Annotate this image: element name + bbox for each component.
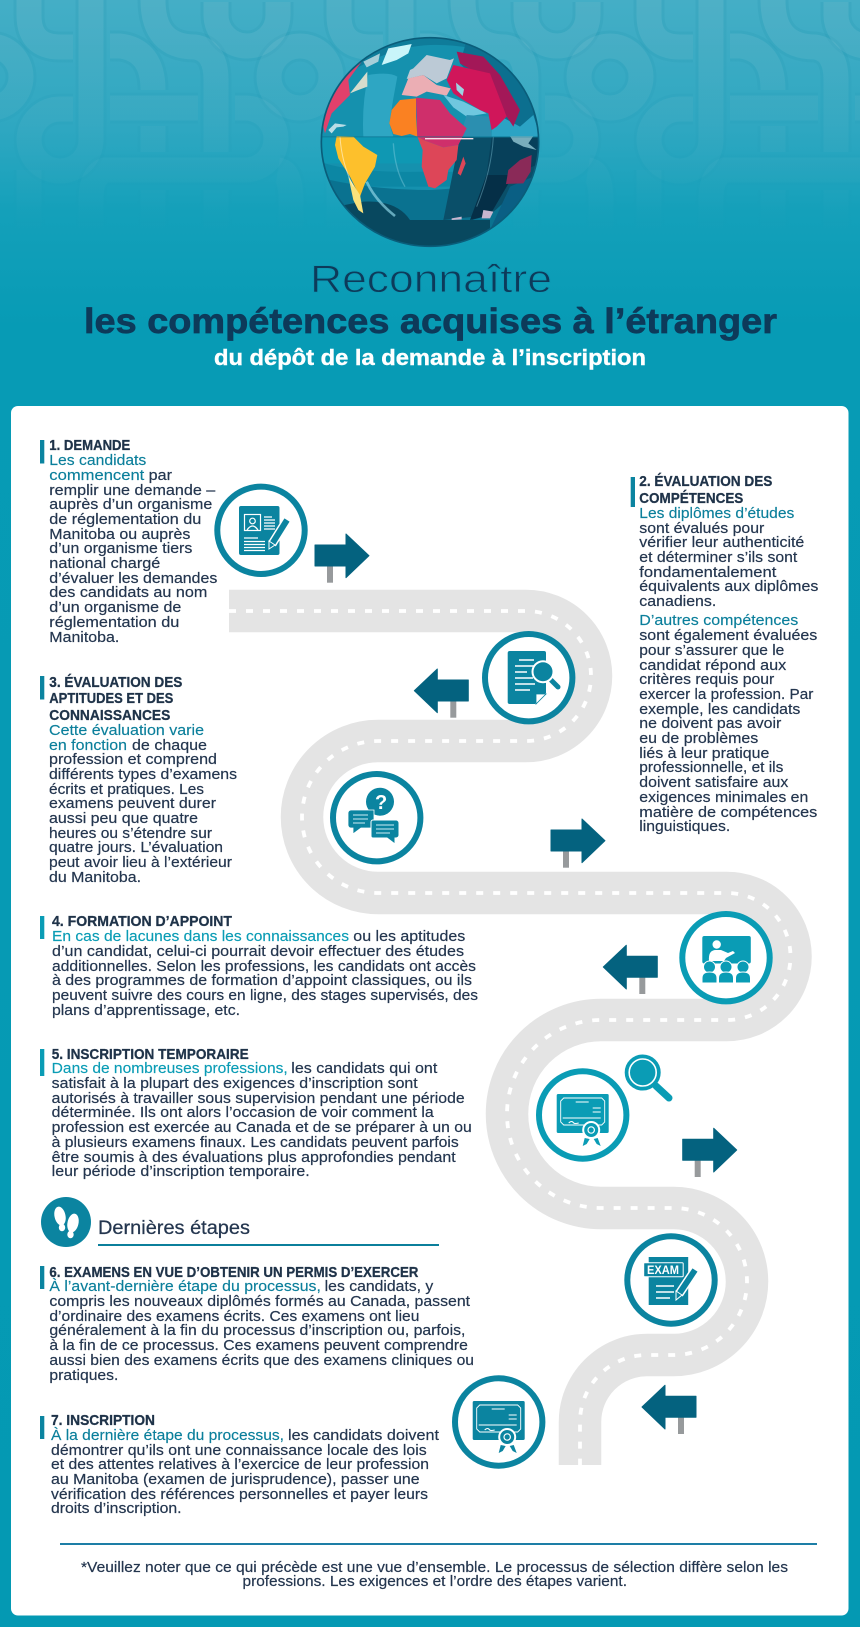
section 4: formation d'appoint: additionnelles. Selon les professions, les candidats ont accès xyxy=(52,958,476,975)
section 1: demande: Les candidats xyxy=(49,452,146,469)
arrow sign 5 xyxy=(683,1128,737,1177)
section 3: evaluation des aptitudes xyxy=(40,674,237,886)
section 1: demande: auprès d’un organisme xyxy=(49,496,212,513)
section 2: evaluation des competences: COMPÉTENCES xyxy=(639,490,744,507)
section 2: evaluation des competences: sont évalués pour xyxy=(639,520,764,537)
section 2: evaluation des competences: professionnelle, et ils xyxy=(639,759,783,776)
icon: teacher and class xyxy=(682,914,770,1001)
footnote: *Veuillez noter que ce qui précède est une vue d’ensemble. Le processus de sélection diffère selon les xyxy=(81,1559,788,1576)
section 2: evaluation des competences: doivent satisfaire aux xyxy=(639,774,789,791)
section 3: evaluation des aptitudes: quatre jours. L’évaluation xyxy=(49,839,223,856)
section 6: examens: compris les nouveaux diplômés formés au Canada, passent xyxy=(49,1293,471,1310)
icon: document review xyxy=(485,634,572,721)
arrow sign 1 xyxy=(315,534,369,583)
section 3: evaluation des aptitudes: de chaque xyxy=(132,737,207,754)
section 7: inscription xyxy=(40,1413,440,1517)
icon: application form xyxy=(217,487,305,574)
section 4: formation d'appoint: plans d’apprentissage, etc. xyxy=(52,1002,240,1019)
panel: white card xyxy=(11,406,848,1616)
section 2: evaluation des competences: pour s’assurer que le xyxy=(639,642,784,659)
section 7: inscription: vérification des références personnelles et payer leurs xyxy=(51,1486,428,1503)
section 3: evaluation des aptitudes: CONNAISSANCES xyxy=(49,708,171,724)
footnote: professions. Les exigences et l’ordre des étapes varient. xyxy=(242,1573,627,1590)
section 1: demande: d’évaluer les demandes xyxy=(49,570,217,587)
section 4: formation d'appoint: ou les aptitudes xyxy=(353,928,465,945)
section 1: demande: Manitoba ou auprès xyxy=(49,526,190,543)
arrow sign 6 xyxy=(642,1385,696,1434)
section 6: examens: pratiques. xyxy=(49,1367,118,1384)
section 4: formation d'appoint: à des programmes de formation d’appoint classiques, ou ils xyxy=(52,972,472,989)
road xyxy=(229,611,790,1465)
icon: magnifying glass xyxy=(626,1056,669,1098)
section 2: evaluation des competences: matière de compétences xyxy=(639,804,817,821)
section 7: inscription: démontrer qu’ils ont une connaissance locale des lois xyxy=(51,1442,427,1459)
section 4: formation d'appoint: peuvent suivre des cours en ligne, des stages supervisés, des xyxy=(52,987,478,1004)
section 1: demande: d’un organisme de xyxy=(49,599,181,616)
section 2: evaluation des competences: eu de problèmes xyxy=(639,730,758,747)
section 6: examens xyxy=(40,1265,474,1384)
section 1: demande: par xyxy=(149,467,172,484)
section 1: demande xyxy=(40,438,217,646)
section 2: evaluation des competences: liés à leur pratique xyxy=(639,745,769,762)
section 1: demande: 1. DEMANDE xyxy=(49,438,131,454)
arrow sign 4 xyxy=(603,945,657,994)
arrow sign 2 xyxy=(414,669,468,718)
section 5: inscription temporaire: 5. INSCRIPTION TEMPORAIRE xyxy=(52,1047,249,1063)
section 2: evaluation des competences: fondamentalement xyxy=(639,564,777,581)
section 4: formation d'appoint: d’un candidat, celui-ci pourrait devoir effectuer des études xyxy=(52,943,464,960)
section 2: evaluation des competences: 2. ÉVALUATION DES xyxy=(639,473,773,490)
title: les compétences acquises à l’étranger xyxy=(84,302,777,341)
section 2: evaluation des competences: candidat répond aux xyxy=(639,657,787,674)
section 7: inscription: au Manitoba (examen de jurisprudence), passer une xyxy=(51,1471,420,1488)
section 2: evaluation des competences xyxy=(631,473,818,835)
arrow sign 3 xyxy=(551,819,605,868)
section 2: evaluation des competences: critères requis pour xyxy=(639,671,774,688)
section 7: inscription: 7. INSCRIPTION xyxy=(51,1413,155,1429)
section 3: evaluation des aptitudes: profession et comprend xyxy=(49,751,217,768)
section 6: examens: à la fin de ce processus. Ces examens peuvent comprendre xyxy=(49,1337,468,1354)
section 2: evaluation des competences: ne doivent pas avoir xyxy=(639,715,781,732)
section 1: demande: remplir une demande – xyxy=(49,482,216,499)
title: Reconnaître xyxy=(310,258,552,301)
section 7: inscription: les candidats doivent xyxy=(288,1427,440,1444)
section 6: examens: généralement à la fin du processus d’inscription ou, parfois, xyxy=(49,1322,465,1339)
section 3: evaluation des aptitudes: aussi peu que quatre xyxy=(49,810,198,827)
heading: dernieres etapes: Dernières étapes xyxy=(98,1218,250,1239)
icon: certificate 7 xyxy=(455,1378,542,1466)
section 1: demande: de réglementation du xyxy=(49,511,201,528)
section 3: evaluation des aptitudes: 3. ÉVALUATION DES xyxy=(49,674,183,691)
section 2: evaluation des competences: vérifier leur authenticité xyxy=(639,534,804,551)
section 3: evaluation des aptitudes: différents types d’examens xyxy=(49,766,237,783)
section 2: evaluation des competences: sont également évaluées xyxy=(639,627,817,644)
section 5: inscription temporaire: profession est exercée au Canada et de se préparer à un ou xyxy=(52,1119,472,1136)
section 4: formation d'appoint: 4. FORMATION D’APPOINT xyxy=(52,914,232,930)
section 1: demande: d’un organisme tiers xyxy=(49,540,192,557)
section 7: inscription: droits d’inscription. xyxy=(51,1500,182,1517)
section 2: evaluation des competences: D’autres compétences xyxy=(639,612,798,629)
section 2: evaluation des competences: canadiens. xyxy=(639,593,716,610)
icon: footprints xyxy=(41,1197,91,1247)
section 5: inscription temporaire: à plusieurs examens finaux. Les candidats peuvent parfois xyxy=(52,1134,459,1151)
section 3: evaluation des aptitudes: Cette évaluation varie xyxy=(49,722,204,739)
section 1: demande: des candidats au nom xyxy=(49,584,207,601)
section 2: evaluation des competences: exigences minimales en xyxy=(639,789,808,806)
section 3: evaluation des aptitudes: peut avoir lieu à l’extérieur xyxy=(49,854,232,871)
section 3: evaluation des aptitudes: examens peuvent durer xyxy=(49,795,216,812)
section 1: demande: Manitoba. xyxy=(49,629,119,646)
section 2: evaluation des competences: Les diplômes d’études xyxy=(639,505,794,522)
section 2: evaluation des competences: équivalents aux diplômes xyxy=(639,578,818,595)
section 7: inscription: et des attentes relatives à l’exercice de leur profession xyxy=(51,1456,429,1473)
section 2: evaluation des competences: exemple, les candidats xyxy=(639,701,800,718)
section 4: formation d'appoint xyxy=(40,914,478,1019)
footnote xyxy=(60,1543,817,1590)
icon: exam xyxy=(627,1236,715,1324)
title xyxy=(84,258,777,370)
section 3: evaluation des aptitudes: heures ou s’étendre sur xyxy=(49,825,212,842)
section 5: inscription temporaire: les candidats qui ont xyxy=(291,1060,438,1077)
section 6: examens: d’ordinaire des examens écrits. Ces examens ont lieu xyxy=(49,1308,419,1325)
section 4: formation d'appoint: En cas de lacunes dans les connaissances xyxy=(52,928,349,945)
section 5: inscription temporaire: déterminée. Ils ont alors l’occasion de voir comment la xyxy=(52,1104,434,1121)
section 6: examens: À l’avant-dernière étape du processus, xyxy=(49,1278,321,1295)
section 1: demande: réglementation du xyxy=(49,614,179,631)
section 5: inscription temporaire: autorisés à travailler sous supervision pendant une période xyxy=(52,1090,465,1107)
section 3: evaluation des aptitudes: APTITUDES ET DES xyxy=(49,691,174,707)
background pattern xyxy=(0,0,860,235)
section 2: evaluation des competences: linguistiques. xyxy=(639,818,730,835)
section 1: demande: commencent xyxy=(49,467,145,484)
section 5: inscription temporaire xyxy=(40,1047,472,1180)
section 2: evaluation des competences: et déterminer s’ils sont xyxy=(639,549,798,566)
icon: speech bubbles with question: ? xyxy=(375,792,387,814)
title: du dépôt de la demande à l’inscription xyxy=(214,345,646,370)
icon: exam: EXAM xyxy=(647,1263,679,1277)
icon: speech bubbles with question xyxy=(333,774,420,861)
section 5: inscription temporaire: satisfait à la plupart des exigences d’inscription sont xyxy=(52,1075,419,1092)
globe xyxy=(320,36,540,248)
section 5: inscription temporaire: Dans de nombreuses professions, xyxy=(52,1060,288,1077)
section 1: demande: national chargé xyxy=(49,555,160,572)
section 6: examens: les candidats, y xyxy=(325,1278,434,1295)
section 6: examens: 6. EXAMENS EN VUE D’OBTENIR UN PERMIS D’EXERCER xyxy=(49,1265,419,1281)
section 6: examens: aussi bien des examens écrits que des examens cliniques ou xyxy=(49,1352,474,1369)
section 3: evaluation des aptitudes: du Manitoba. xyxy=(49,869,141,886)
section 3: evaluation des aptitudes: écrits et pratiques. Les xyxy=(49,781,204,798)
section 2: evaluation des competences: exercer la profession. Par xyxy=(639,686,813,703)
icon: certificate 5 xyxy=(539,1071,626,1159)
section 3: evaluation des aptitudes: en fonction xyxy=(49,737,127,754)
section 5: inscription temporaire: leur période d’inscription temporaire. xyxy=(52,1163,310,1180)
section 5: inscription temporaire: être soumis à des évaluations plus approfondies pendant xyxy=(52,1149,457,1166)
section 7: inscription: À la dernière étape du processus, xyxy=(51,1427,284,1444)
